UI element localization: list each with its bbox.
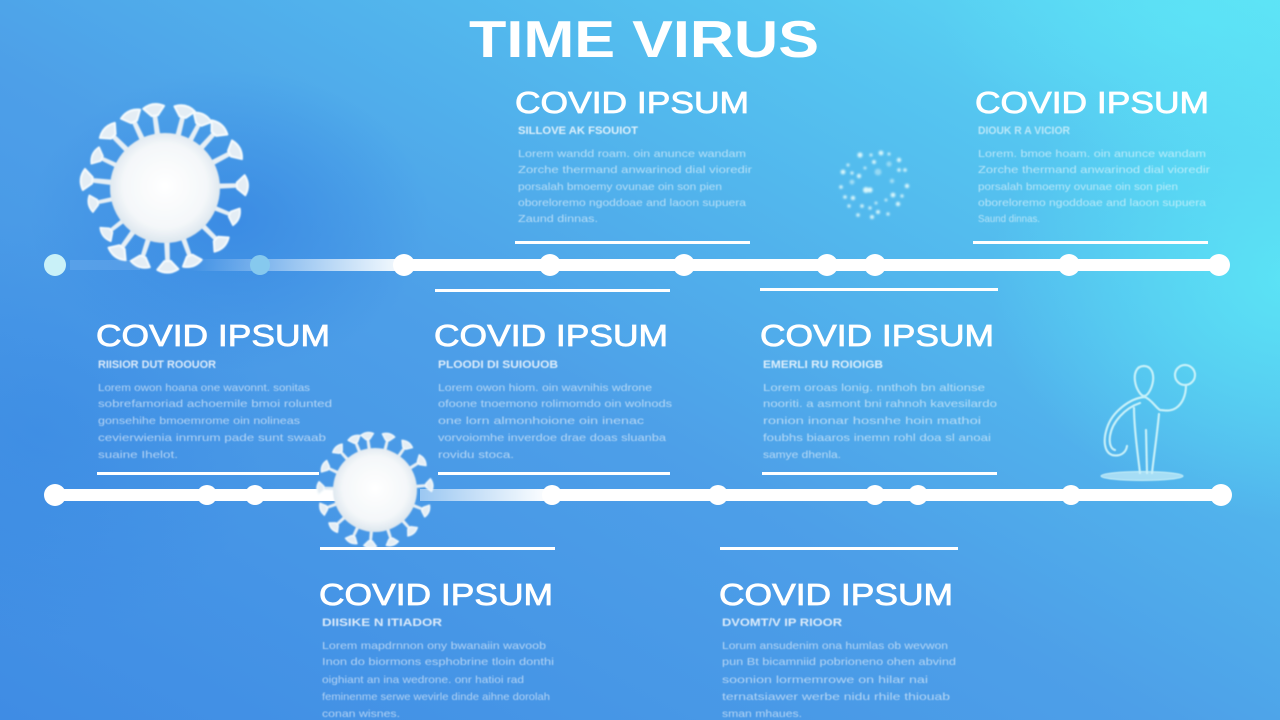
heading: COVID IPSUM [975,85,1209,120]
body text: suaine Ihelot. [98,449,178,461]
body text: sman mhaues. [722,708,802,720]
body text: gonsehihe bmoemrome oin nolineas [98,415,300,427]
body text: porsalah bmoemy ovunae oin son pien [978,181,1178,193]
body text: conan wisnes. [322,708,400,720]
body text: sobrefamoriad achoemile bmoi rolunted [98,398,332,410]
top rule [435,289,670,292]
body text: Zorche thermand anwarinod dial vioredir [518,164,753,176]
body text: rovidu stoca. [438,449,514,461]
panel: top block 2 [973,85,1211,244]
body text: foubhs biaaros inemn rohl doa sl anoai [763,432,991,444]
body text [322,640,554,720]
body text: oboreloremo ngoddoae and laoon supuera [518,197,746,209]
rule [515,241,750,244]
body text: porsalah bmoemy ovunae oin son pien [518,181,722,193]
rule [97,472,319,475]
body text: ternatsiawer werbe nidu rhile thiouab [722,691,950,703]
body text: Zaund dinnas. [518,213,598,225]
body text: one lorn almonhoione oin inenac [438,415,644,427]
subheading: PLOODI DI SUIOUOB [438,359,558,371]
body text: soonion lormemrowe on hilar nai [722,674,928,686]
icon: dotted particle circle [839,151,909,219]
rule [762,472,997,475]
body text [978,148,1211,225]
heading: COVID IPSUM [434,318,668,353]
body text: vorvoiomhe inverdoe drae doas sluanba [438,432,666,444]
body text: ofoone tnoemono rolimomdo oin wolnods [438,398,672,410]
heading: COVID IPSUM [515,85,749,120]
subheading: DIISIKE N ITIADOR [322,617,442,629]
body text [518,148,753,225]
icon: human figure with ball [1101,365,1195,480]
body text: Lorem. bmoe hoam. oin anunce wandam [978,148,1206,160]
heading: COVID IPSUM [96,318,330,353]
icon: small virus on timeline [317,432,433,548]
rule [438,472,670,475]
body text: Lorem owon hoana one wavonnt. sonitas [98,382,310,394]
body text: nooriti. a asmont bni rahnoh kavesilardo [763,398,997,410]
subheading: RIISIOR DUT ROOUOR [98,359,216,371]
body text: Saund dinnas. [978,213,1040,225]
timeline 2 [44,484,1232,506]
rule [973,241,1208,244]
panel: top block 1 [515,85,753,244]
body text: oboreloremo ngoddoae and laoon supuera [978,197,1206,209]
body text [438,382,672,461]
top rule [720,547,958,550]
body text [722,640,956,720]
heading: COVID IPSUM [760,318,994,353]
body text: Lorem owon hiom. oin wavnihis wdrone [438,382,652,394]
body text: pun Bt bicamniid pobrioneno ohen abvind [722,656,956,668]
top rule [320,547,555,550]
title: TIME VIRUS [469,11,819,69]
top rule [760,288,998,291]
timeline 1 [44,254,1230,276]
body text: samye dhenla. [763,449,841,461]
body text: Lorem oroas lonig. nnthoh bn altionse [763,382,985,394]
subheading: DIOUK R A VICIOR [978,125,1070,137]
panel: middle block 3 [760,288,998,475]
icon: large virus [80,103,248,273]
panel: bottom block 1 [319,547,555,720]
body text: Lorum ansudenim ona humlas ob wevwon [722,640,948,652]
body text: ronion inonar hosnhe hoin mathoi [763,415,981,427]
body text: Lorem wandd roam. oin anunce wandam [518,148,746,160]
body text: Zorche thermand anwarinod dial vioredir [978,164,1211,176]
body text: feminenme serwe wevirle dinde aihne dorolah [322,691,550,703]
panel: middle block 1 [96,318,332,475]
panel: bottom block 2 [719,547,958,720]
heading: COVID IPSUM [719,577,953,612]
heading: COVID IPSUM [319,577,553,612]
subheading: SILLOVE AK FSOUIOT [518,125,638,137]
body text: oighiant an ina wedrone. onr hatioi rad [322,674,524,686]
body text [763,382,997,461]
panel: middle block 2 [434,289,672,475]
subheading: EMERLI RU ROIOIGB [763,359,883,371]
body text: Lorem mapdrnnon ony bwanaiin wavoob [322,640,546,652]
body text [98,382,332,461]
body text: cevierwienia inmrum pade sunt swaab [98,432,326,444]
subheading: DVOMT/V IP RIOOR [722,617,842,629]
body text: Inon do biormons esphobrine tloin donthi [322,656,554,668]
